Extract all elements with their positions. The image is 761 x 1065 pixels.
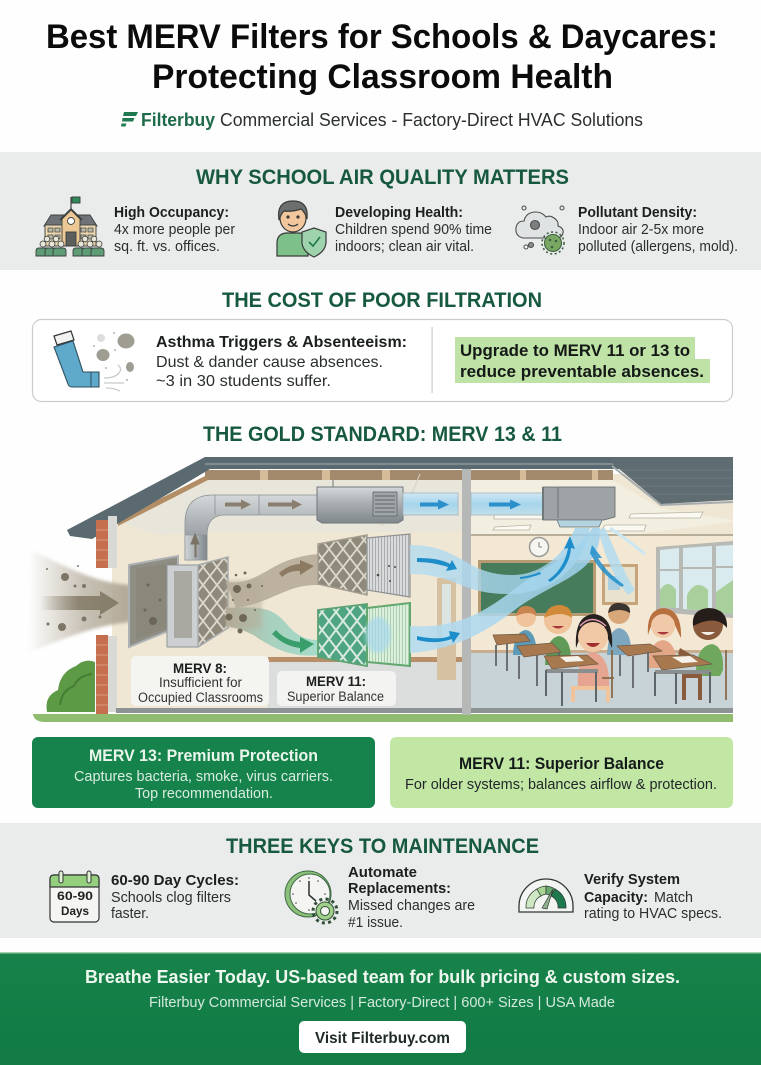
icon: inhaler and dust [54, 331, 134, 391]
icon: clock with gear [285, 871, 337, 923]
text: high occupancy: High Occupancy: [114, 204, 229, 221]
filter panel: MERV 8 housing [129, 556, 228, 647]
label: MERV 8: MERV 8: [173, 660, 227, 676]
heading: WHY SCHOOL AIR QUALITY MATTERS [196, 166, 569, 189]
text: developing health: Children spend 90% time [335, 221, 492, 238]
text: pollutant density: polluted (allergens, mold). [578, 238, 738, 255]
card: MERV 11 superior balance [390, 737, 733, 808]
text: asthma triggers: Asthma Triggers & Absenteeism: [156, 334, 407, 351]
arrows: blue duct [420, 500, 521, 510]
text: asthma triggers: ~3 in 30 students suffer. [156, 373, 331, 390]
title: Protecting Classroom Health [152, 58, 613, 96]
duct: grey elbow [185, 495, 320, 560]
text: developing health [335, 204, 492, 255]
dirty air inflow [34, 554, 128, 648]
text: 60-90 day cycles [111, 872, 239, 922]
students and desks [493, 602, 727, 706]
label: MERV 8: Insufficient for [159, 675, 242, 690]
text: verify system capacity: rating to HVAC specs. [584, 905, 722, 922]
text: automate replacements: #1 issue. [348, 914, 403, 931]
chalkboard [478, 560, 596, 616]
text: asthma triggers: Dust & dander cause absences. [156, 354, 383, 371]
arrow: brown flow [279, 560, 314, 577]
classroom wall right [471, 535, 733, 655]
green stream lower [226, 607, 320, 656]
text: pollutant density: Indoor air 2-5x more [578, 221, 704, 238]
text: 60-90 day cycles: 60-90 Day Cycles: [111, 872, 239, 889]
text: high occupancy: sq. ft. vs. offices. [114, 238, 220, 255]
student: front girl [573, 614, 612, 702]
text: verify system capacity: Match [654, 889, 693, 906]
student: green shirt [544, 605, 572, 665]
label: MERV 11: Superior Balance [287, 689, 384, 704]
label: MERV 11 [277, 671, 396, 706]
roof shingles right [612, 463, 733, 504]
desks front [544, 655, 712, 670]
heading: the gold standard: THE GOLD STANDARD: MERV 13 & 11 [203, 423, 562, 446]
illustration: school HVAC cross-section [28, 457, 733, 722]
ceiling [117, 480, 465, 535]
card: MERV 11 superior balance: For older systems; balances airflow & protection. [405, 776, 717, 793]
floors [268, 662, 462, 708]
heading: THREE KEYS TO MAINTENANCE [226, 835, 539, 858]
callout: upgrade highlight: reduce preventable absences. [460, 362, 704, 381]
dirty stream upper [226, 554, 320, 608]
icon: school with students [36, 197, 104, 256]
text: automate replacements [348, 864, 475, 931]
icon: calendar 60-90 days: Days [61, 904, 89, 918]
icon: Filterbuy logo [121, 112, 138, 126]
heading: the cost of poor filtration: THE COST OF POOR FILTRATION [222, 289, 542, 312]
panel: asthma card [32, 320, 732, 402]
student: back left [513, 606, 537, 655]
subtitle with Filterbuy logo: Filterbuy [141, 110, 215, 130]
icon: child with shield [277, 201, 326, 257]
icon: calendar 60-90 days [50, 871, 99, 922]
footer headline: Breathe Easier Today. US-based team for bulk pricing & custom sizes. [85, 967, 680, 987]
wall post [462, 469, 471, 715]
text: high occupancy: 4x more people per [114, 221, 235, 238]
title: Best MERV Filters for Schools & Daycares: [46, 18, 718, 56]
arrow: duct up [191, 534, 199, 557]
bush [46, 661, 95, 712]
card: MERV 13 premium protection: Top recommendation. [135, 785, 273, 802]
brick wall [96, 520, 108, 568]
rafter beam [205, 470, 613, 480]
card: MERV 13 premium protection: MERV 13: Premium Protection [89, 746, 318, 765]
student: pink right [648, 608, 681, 668]
text: 60-90 day cycles: faster. [111, 905, 149, 922]
button: visit filterbuy [299, 1021, 466, 1053]
text: automate replacements: Automate [348, 864, 417, 881]
label: MERV 8 [131, 656, 269, 706]
poster [602, 564, 638, 605]
door [437, 578, 456, 680]
callout: upgrade highlight: Upgrade to MERV 11 or 13 to [460, 341, 690, 360]
icon: pollutant cloud and virus [516, 206, 564, 254]
text: 60-90 day cycles: Schools clog filters [111, 889, 231, 906]
label: MERV 8: Occupied Classrooms [138, 690, 263, 705]
filter: lower green [318, 603, 410, 666]
student: front boy [678, 608, 727, 700]
arrows: clean air [417, 536, 624, 643]
arrows: duct grey flow [225, 500, 302, 510]
text: verify system capacity: Capacity: [584, 889, 648, 906]
callout: upgrade highlight [455, 337, 710, 383]
desks rear [493, 634, 662, 657]
ground strip [33, 714, 733, 722]
button: visit filterbuy: Visit Filterbuy.com [315, 1030, 450, 1047]
title [46, 18, 718, 96]
icon: calendar 60-90 days: 60-90 [57, 889, 93, 903]
air handler box [317, 480, 403, 523]
roof [67, 457, 619, 539]
arrow: green flow [272, 630, 314, 653]
icon: capacity gauge [519, 879, 573, 912]
panel: why school air quality matters [0, 152, 761, 270]
card: MERV 13 premium protection: Captures bacteria, smoke, virus carriers. [74, 768, 333, 785]
ceiling diffuser box [543, 487, 615, 527]
footer details: Filterbuy Commercial Services | Factory-Direct | 600+ Sizes | USA Made [149, 995, 615, 1011]
label: MERV 11: MERV 11: [306, 673, 366, 689]
panel: three keys to maintenance [0, 823, 761, 938]
text: asthma triggers [156, 334, 407, 390]
card: MERV 11 superior balance: MERV 11: Superior Balance [459, 754, 664, 773]
clean air streams [410, 528, 645, 653]
card: MERV 13 premium protection [32, 737, 375, 808]
text: pollutant density [578, 204, 738, 255]
window [656, 541, 733, 618]
footer [0, 952, 761, 1065]
text: automate replacements: Replacements: [348, 880, 451, 897]
text: automate replacements: Missed changes are [348, 897, 475, 914]
subtitle with Filterbuy logo: Commercial Services - Factory-Direct HVAC Solutions [220, 110, 643, 130]
ceiling lights [493, 512, 703, 531]
filter: upper [318, 534, 410, 597]
interior walls [112, 474, 733, 712]
text: verify system capacity [584, 871, 722, 922]
student: back center [607, 602, 631, 655]
text: high occupancy [114, 204, 235, 255]
text: pollutant density: Pollutant Density: [578, 204, 697, 221]
text: developing health: indoors; clean air vital. [335, 238, 474, 255]
text: verify system capacity: Verify System [584, 871, 680, 888]
duct: blue clean air [403, 493, 549, 515]
clock [530, 538, 548, 556]
text: developing health: Developing Health: [335, 204, 463, 221]
